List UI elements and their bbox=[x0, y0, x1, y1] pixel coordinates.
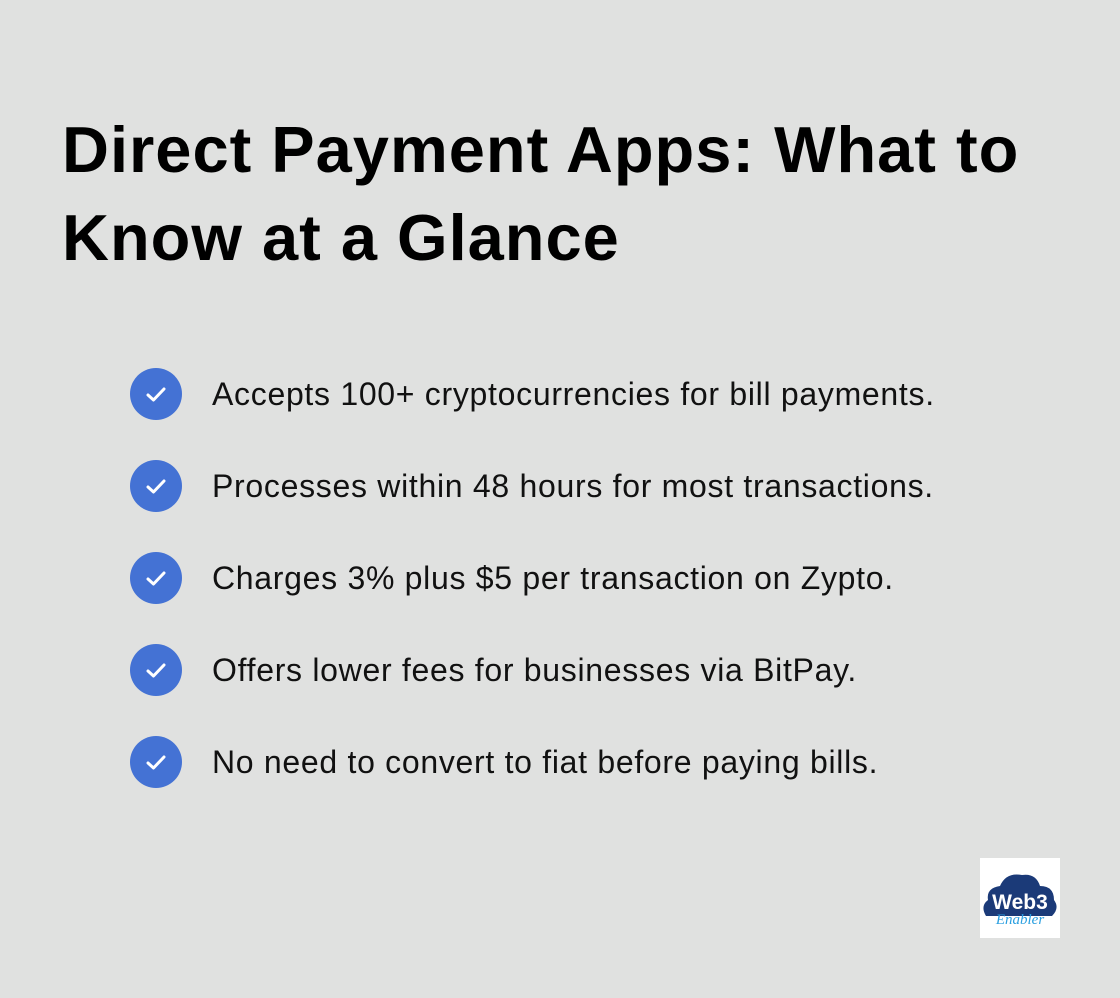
title bbox=[62, 113, 1019, 274]
item 3 bbox=[130, 552, 894, 604]
item 2: Processes within 48 hours for most transactions. bbox=[212, 468, 934, 504]
icon: check bbox=[130, 552, 182, 604]
item 4 bbox=[130, 644, 857, 696]
item 2 bbox=[130, 460, 934, 512]
title: Direct Payment Apps: What to bbox=[62, 113, 1019, 186]
logo bbox=[980, 858, 1060, 938]
icon: check bbox=[130, 460, 182, 512]
item 4: Offers lower fees for businesses via BitPay. bbox=[212, 652, 857, 688]
item 5: No need to convert to fiat before paying bills. bbox=[212, 744, 878, 780]
icon: check bbox=[130, 644, 182, 696]
logo: Web3 bbox=[992, 891, 1048, 914]
logo: Enabler bbox=[995, 912, 1044, 928]
icon: check bbox=[130, 736, 182, 788]
item 1: Accepts 100+ cryptocurrencies for bill payments. bbox=[212, 376, 935, 412]
item 5 bbox=[130, 736, 878, 788]
item 1 bbox=[130, 368, 935, 420]
icon: check bbox=[130, 368, 182, 420]
item 3: Charges 3% plus $5 per transaction on Zypto. bbox=[212, 560, 894, 596]
title: Know at a Glance bbox=[62, 201, 620, 274]
